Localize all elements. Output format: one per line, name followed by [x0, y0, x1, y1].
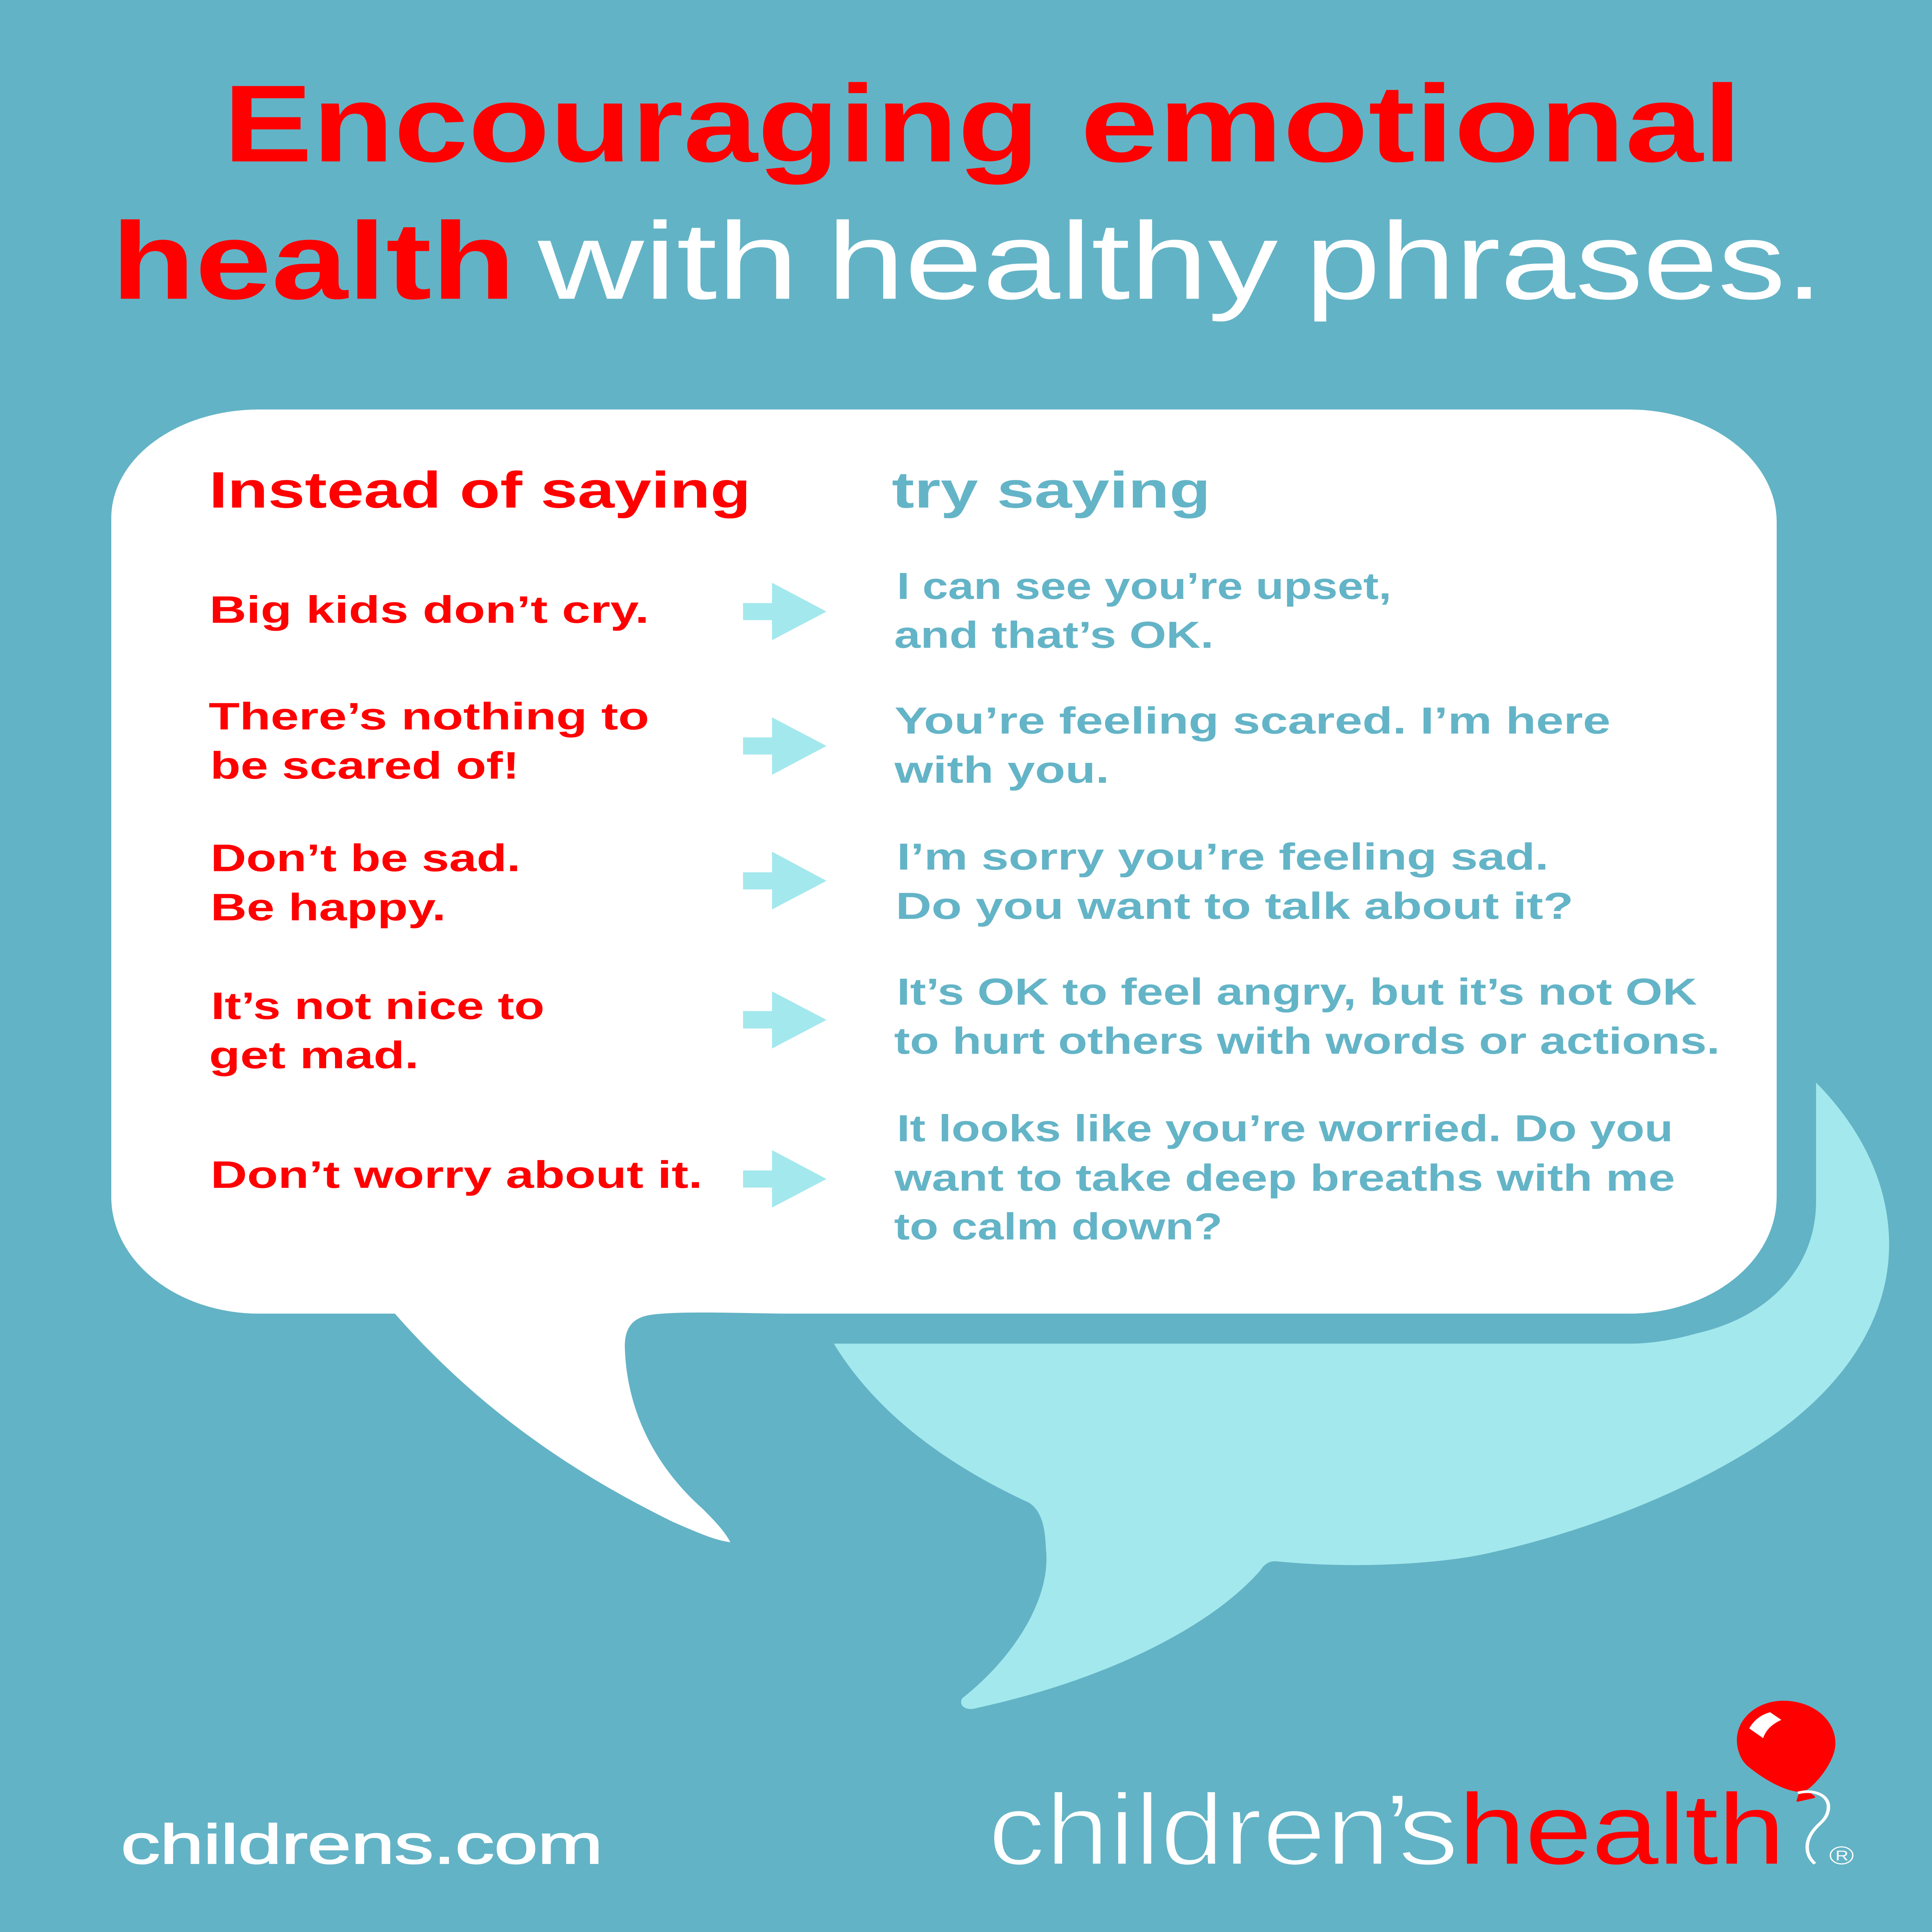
title: healthy [827, 200, 1278, 323]
column: instead of saying phrases: Don’t be sad. [211, 837, 520, 879]
arrows [743, 583, 827, 1208]
speech bubble: white panel [111, 410, 1777, 1542]
column: try saying phrases: I’m sorry you’re feeling sad. [897, 836, 1549, 878]
column: try saying phrases: want to take deep breaths with me [894, 1157, 1675, 1199]
column: instead of saying phrases: There’s nothing to [209, 695, 649, 738]
logo wordmark: children's: children [988, 1773, 1390, 1887]
icon: red balloon [1737, 1701, 1835, 1864]
speech bubble: light blue [834, 1083, 1889, 1709]
title: Encouraging [223, 63, 1039, 185]
title: health [111, 200, 515, 322]
heading: instead of saying: Instead of saying [209, 461, 751, 519]
column: instead of saying phrases: It’s not nice to [211, 985, 544, 1027]
column: try saying phrases: It’s OK to feel angry, but it’s not OK [897, 971, 1697, 1013]
title: emotional [1080, 63, 1742, 185]
column: try saying phrases: to calm down? [894, 1206, 1223, 1248]
logo wordmark: children's: ’ [1383, 1773, 1412, 1887]
column: instead of saying phrases: get mad. [209, 1034, 419, 1077]
column: instead of saying phrases: Don’t worry about it. [211, 1153, 702, 1196]
column: instead of saying phrases: Be happy. [211, 886, 446, 929]
logo wordmark: health: health [1459, 1773, 1785, 1885]
column: try saying phrases: with you. [894, 749, 1109, 791]
column: try saying phrases [894, 565, 1720, 1248]
column: try saying phrases: and that’s OK. [894, 614, 1214, 656]
column: instead of saying phrases: be scared of! [210, 744, 519, 787]
website url: childrens.com [121, 1814, 603, 1875]
column: try saying phrases: I can see you’re upset, [897, 565, 1391, 607]
title [111, 63, 1823, 323]
icon: registered mark: R [1835, 1848, 1849, 1863]
column: try saying phrases: to hurt others with words or actions. [894, 1020, 1720, 1062]
column: instead of saying phrases: Big kids don’t cry. [209, 588, 649, 631]
column: try saying phrases: It looks like you’re worried. Do you [897, 1107, 1673, 1150]
heading: try saying: try saying [892, 461, 1211, 519]
title: with [536, 200, 799, 322]
column: instead of saying phrases [209, 588, 702, 1196]
column: try saying phrases: You’re feeling scared. I’m here [895, 700, 1611, 742]
column: try saying phrases: Do you want to talk about it? [896, 885, 1573, 927]
icon: registered mark [1830, 1847, 1853, 1864]
title: phrases. [1305, 200, 1823, 323]
logo wordmark: children's: s [1398, 1773, 1459, 1887]
logo: children's health [988, 1701, 1853, 1887]
